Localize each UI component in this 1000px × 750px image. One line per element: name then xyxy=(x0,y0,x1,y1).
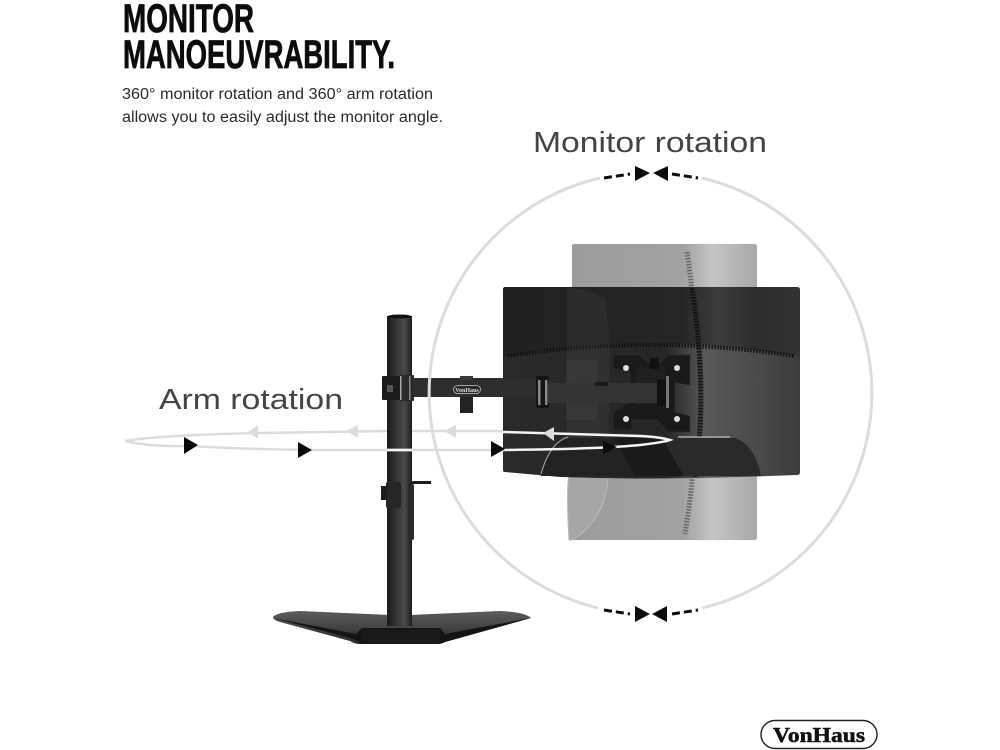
rotated monitor ghost xyxy=(568,244,757,540)
monitor rear xyxy=(503,287,800,478)
VESA mount plate xyxy=(613,355,690,432)
label: monitor rotation: Monitor rotation xyxy=(533,127,767,159)
arm logo xyxy=(454,386,480,394)
arm logo: VonHaus xyxy=(455,388,479,394)
label: arm rotation: Arm rotation xyxy=(159,384,343,416)
arm rotation ellipse front: lower pass xyxy=(190,432,670,450)
description text: allows you to easily adjust the monitor angle. xyxy=(122,109,443,126)
stand pole xyxy=(381,314,431,626)
bottom rotation arrows xyxy=(604,606,698,622)
description text xyxy=(122,86,443,126)
description text: 360° monitor rotation and 360° arm rotation xyxy=(122,86,433,103)
arm rotation ellipse back: upper pass xyxy=(125,431,503,446)
black direction arrows xyxy=(184,437,617,458)
brand logo xyxy=(761,720,877,748)
support arm xyxy=(412,376,669,413)
stand base xyxy=(273,611,531,644)
pole clamp xyxy=(382,375,414,401)
top rotation arrows xyxy=(604,166,698,181)
brand logo: VonHaus xyxy=(773,723,865,747)
monitor rotation circle xyxy=(429,178,872,608)
gray direction arrows xyxy=(248,425,554,441)
title xyxy=(123,0,395,77)
title: MANOEUVRABILITY. xyxy=(123,33,395,77)
